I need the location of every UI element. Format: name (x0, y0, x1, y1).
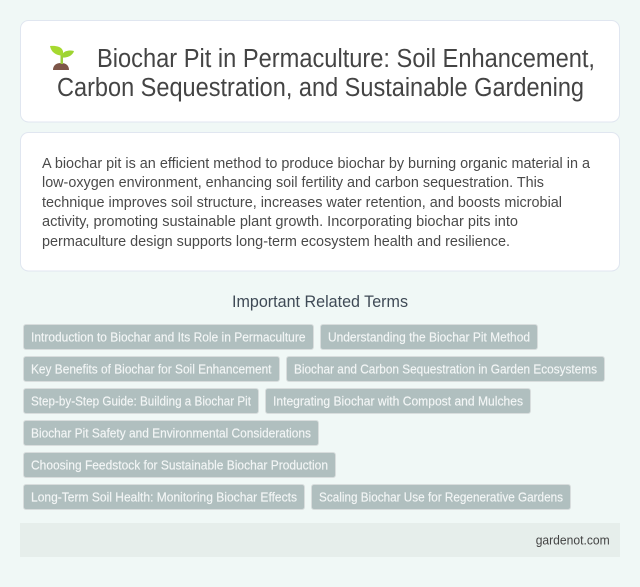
tag: carbon sequestration: Biochar and Carbon Sequestration in Garden Ecosystems (294, 362, 597, 376)
title: Carbon Sequestration, and Sustainable Gardening (57, 74, 584, 102)
title (57, 45, 595, 102)
text block: description (42, 155, 591, 250)
text block: description: technique improves soil structure, increases water retention, and boosts microbial (42, 194, 562, 211)
tag: compost and mulches: Integrating Biochar with Compost and Mulches (273, 394, 523, 408)
tag: pit method (320, 324, 538, 350)
heading: important related terms: Important Related Terms (232, 293, 408, 311)
tag: carbon sequestration (286, 356, 604, 382)
tag: step-by-step guide (24, 388, 258, 414)
text block: description: permaculture design supports long-term ecosystem health and resilience. (42, 233, 510, 250)
panel: description card (20, 132, 620, 271)
tag: compost and mulches (266, 388, 530, 414)
tag: feedstock: Choosing Feedstock for Sustainable Biochar Production (31, 458, 328, 472)
tag: pit method: Understanding the Biochar Pit Method (328, 330, 530, 344)
tag: safety (24, 420, 318, 446)
tag: feedstock (24, 452, 336, 478)
title: Biochar Pit in Permaculture: Soil Enhancement, (97, 45, 595, 73)
tag: scaling: Scaling Biochar Use for Regenerative Gardens (319, 490, 563, 504)
tag: key benefits (24, 356, 280, 382)
panel: title card (20, 20, 620, 122)
panel: related term tags (24, 324, 604, 510)
tag: key benefits: Key Benefits of Biochar for Soil Enhancement (31, 362, 272, 376)
tag: scaling (312, 484, 570, 510)
tag: safety: Biochar Pit Safety and Environmental Considerations (31, 426, 311, 440)
text block: description: A biochar pit is an efficient method to produce biochar by burning organic material in a (42, 155, 591, 172)
tag: long-term soil health (24, 484, 304, 510)
footer (20, 523, 620, 557)
text block: description: low-oxygen environment, enhancing soil fertility and carbon sequestration. This (42, 174, 544, 191)
tag: introduction: Introduction to Biochar and Its Role in Permaculture (31, 330, 306, 344)
text block: description: activity, promoting sustainable plant growth. Incorporating biochar pits into (42, 213, 518, 230)
footer: gardenot.com (536, 532, 610, 547)
tag: long-term soil health: Long-Term Soil Health: Monitoring Biochar Effects (31, 490, 297, 504)
tag: introduction (24, 324, 314, 350)
icon: seedling (50, 46, 74, 70)
tag: step-by-step guide: Step-by-Step Guide: Building a Biochar Pit (31, 394, 251, 408)
